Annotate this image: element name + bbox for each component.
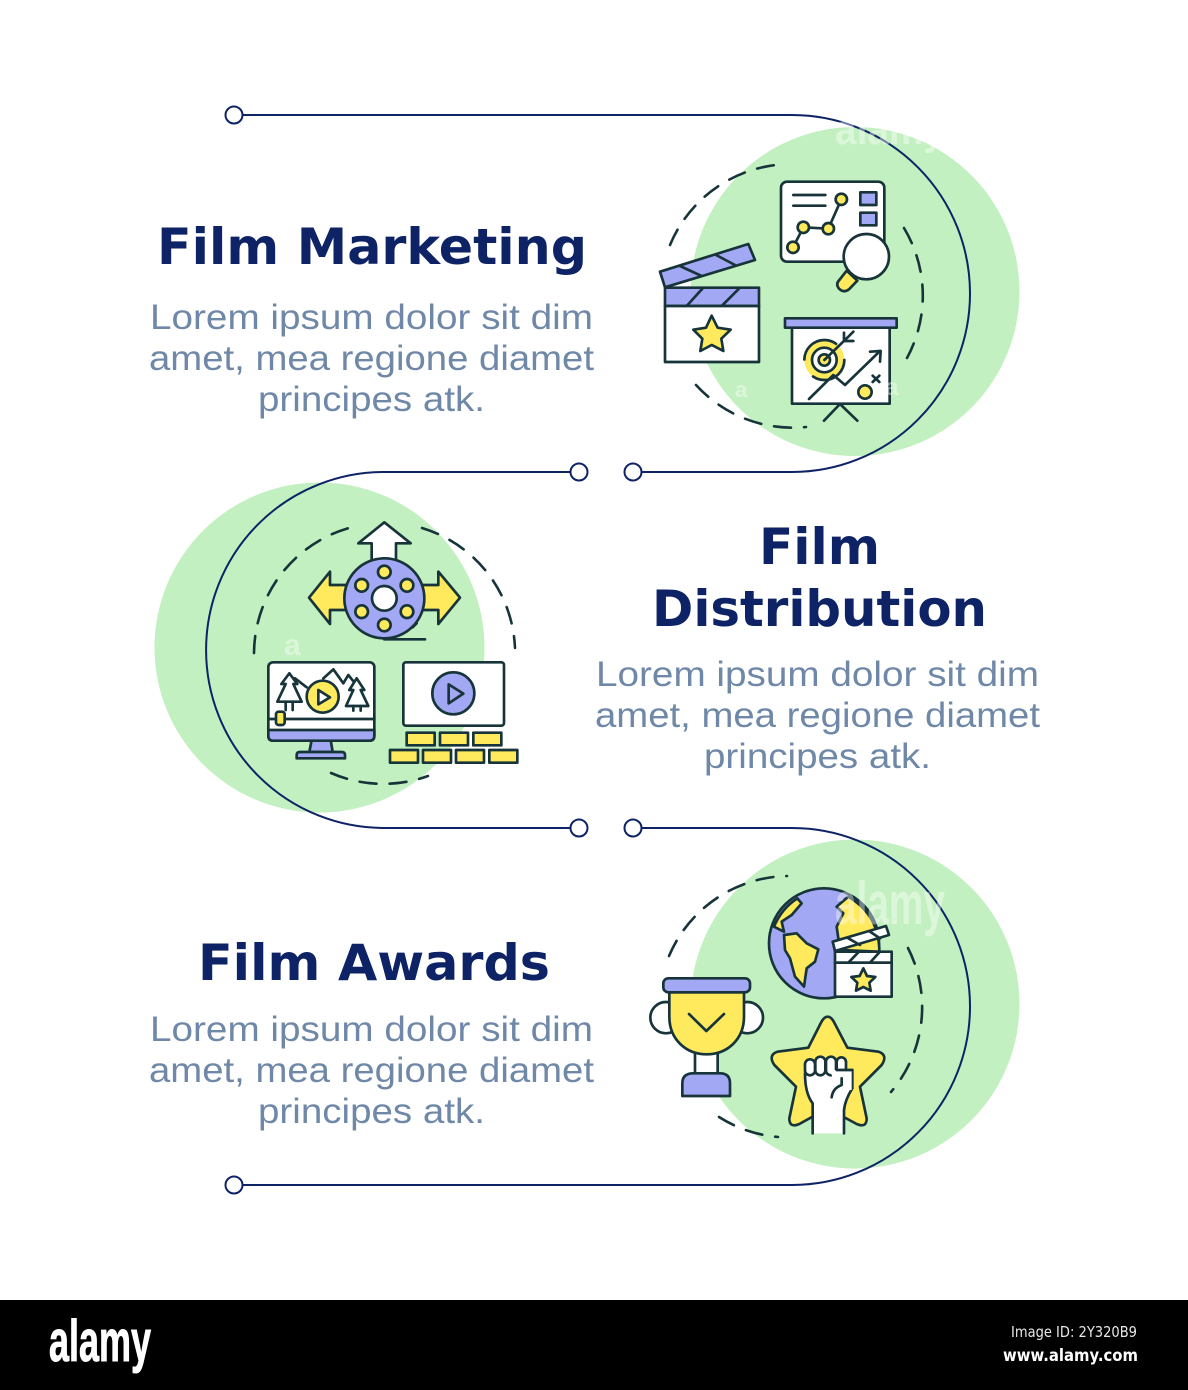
dashed ring: marketing <box>670 165 923 428</box>
heading: film distribution: Distribution <box>652 580 987 638</box>
green circle: distribution <box>154 482 484 812</box>
icon: analytics chart with magnifier <box>781 182 889 291</box>
green circle: awards <box>690 840 1020 1168</box>
panel: film awards text <box>149 934 594 1131</box>
icon: screen with seats <box>390 662 517 763</box>
icon: desktop monitor with video <box>268 662 374 758</box>
text block: marketing description: amet, mea regione diamet <box>149 339 594 378</box>
panel: film marketing text <box>149 218 594 419</box>
watermark <box>284 105 945 937</box>
text block: awards description <box>149 1010 594 1131</box>
footer image id: Image ID: 2Y320B9 <box>1011 1323 1137 1341</box>
heading: film marketing: Film Marketing <box>157 218 587 276</box>
watermark: a <box>885 374 899 401</box>
watermark: alamy <box>835 870 945 937</box>
watermark: alamy <box>835 105 945 154</box>
footer url: www.alamy.com <box>1003 1346 1138 1366</box>
dashed ring: distribution <box>254 528 515 784</box>
heading: film awards: Film Awards <box>198 934 550 992</box>
text block: distribution description: principes atk. <box>704 737 931 776</box>
green circle: marketing <box>690 127 1020 456</box>
connector line: top segment <box>226 106 970 480</box>
panel: film distribution text <box>595 518 1040 776</box>
text block: awards description: principes atk. <box>258 1092 485 1131</box>
icon: trophy <box>650 978 763 1096</box>
text block: marketing description: principes atk. <box>258 380 485 419</box>
connector line: bottom segment <box>226 820 970 1194</box>
dashed ring: awards <box>669 876 922 1137</box>
icon: star with raised fist <box>772 1017 884 1133</box>
heading: film distribution <box>652 518 987 638</box>
text block: distribution description: Lorem ipsum dolor sit dim <box>596 655 1039 694</box>
heading: film distribution: Film <box>759 518 880 576</box>
text block: marketing description <box>149 298 594 419</box>
footer bar <box>0 1300 1188 1390</box>
text block: distribution description <box>595 655 1040 776</box>
icon: film reel with arrows <box>309 522 460 639</box>
text block: awards description: Lorem ipsum dolor sit dim <box>150 1010 593 1049</box>
watermark: a <box>735 377 748 402</box>
icon: globe with clapperboard <box>769 888 892 998</box>
text block: marketing description: Lorem ipsum dolor sit dim <box>150 298 593 337</box>
connector line: middle segment <box>206 464 588 836</box>
icon: presentation board with target <box>785 318 897 421</box>
text block: distribution description: amet, mea regione diamet <box>595 696 1040 735</box>
footer logo: alamy <box>49 1309 151 1374</box>
text block: awards description: amet, mea regione diamet <box>149 1051 594 1090</box>
icon: clapperboard with star <box>660 244 759 362</box>
watermark: a <box>284 629 301 662</box>
